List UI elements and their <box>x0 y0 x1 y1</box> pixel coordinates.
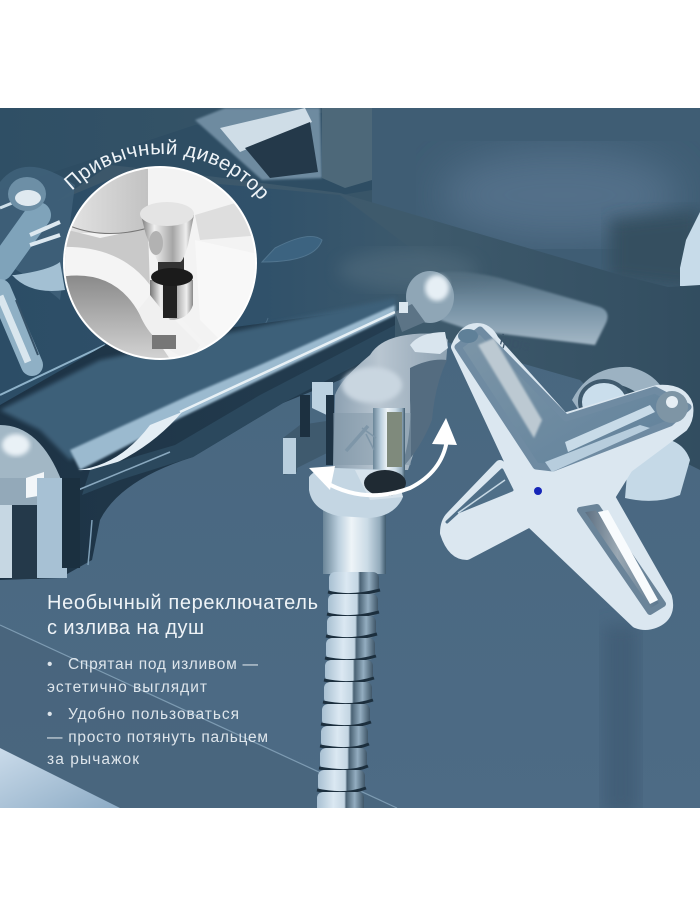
hose connector <box>309 468 406 574</box>
infographic canvas <box>0 108 700 808</box>
cross handle <box>445 328 688 625</box>
bullet list: Спрятан под изливом — <box>68 656 258 673</box>
bullet list: • <box>47 706 52 723</box>
knob behind the handle <box>572 367 690 501</box>
chrome junction ball <box>395 271 454 332</box>
inset circle: diverter <box>63 166 257 360</box>
bullet list <box>47 656 268 768</box>
blue dot on handle <box>534 487 542 495</box>
spout end cap <box>0 425 92 579</box>
spout <box>0 298 395 580</box>
left cross handle <box>0 167 105 395</box>
brand mark: ippis <box>498 331 532 355</box>
bullet list: Удобно пользоваться <box>68 706 239 723</box>
bullet list: эстетично выглядит <box>47 679 207 696</box>
curved label: Привычный дивертор <box>64 139 267 199</box>
shower hose <box>317 572 380 814</box>
gooseneck <box>338 250 608 345</box>
diverter lever <box>283 382 334 475</box>
heading: с излива на душ <box>47 617 204 639</box>
photo background: bathroom wall <box>0 108 700 808</box>
faucet deck <box>0 165 700 470</box>
rotation arrow <box>309 418 457 495</box>
right chrome sliver <box>680 212 700 288</box>
heading: Необычный переключатель <box>47 592 318 614</box>
bullet list: за рычажок <box>47 751 139 768</box>
thermostat back cylinder <box>195 108 372 194</box>
bullet list: — просто потянуть пальцем <box>47 729 268 746</box>
bullet list: • <box>47 656 52 673</box>
heading <box>47 592 318 639</box>
diverter neck <box>333 332 448 480</box>
